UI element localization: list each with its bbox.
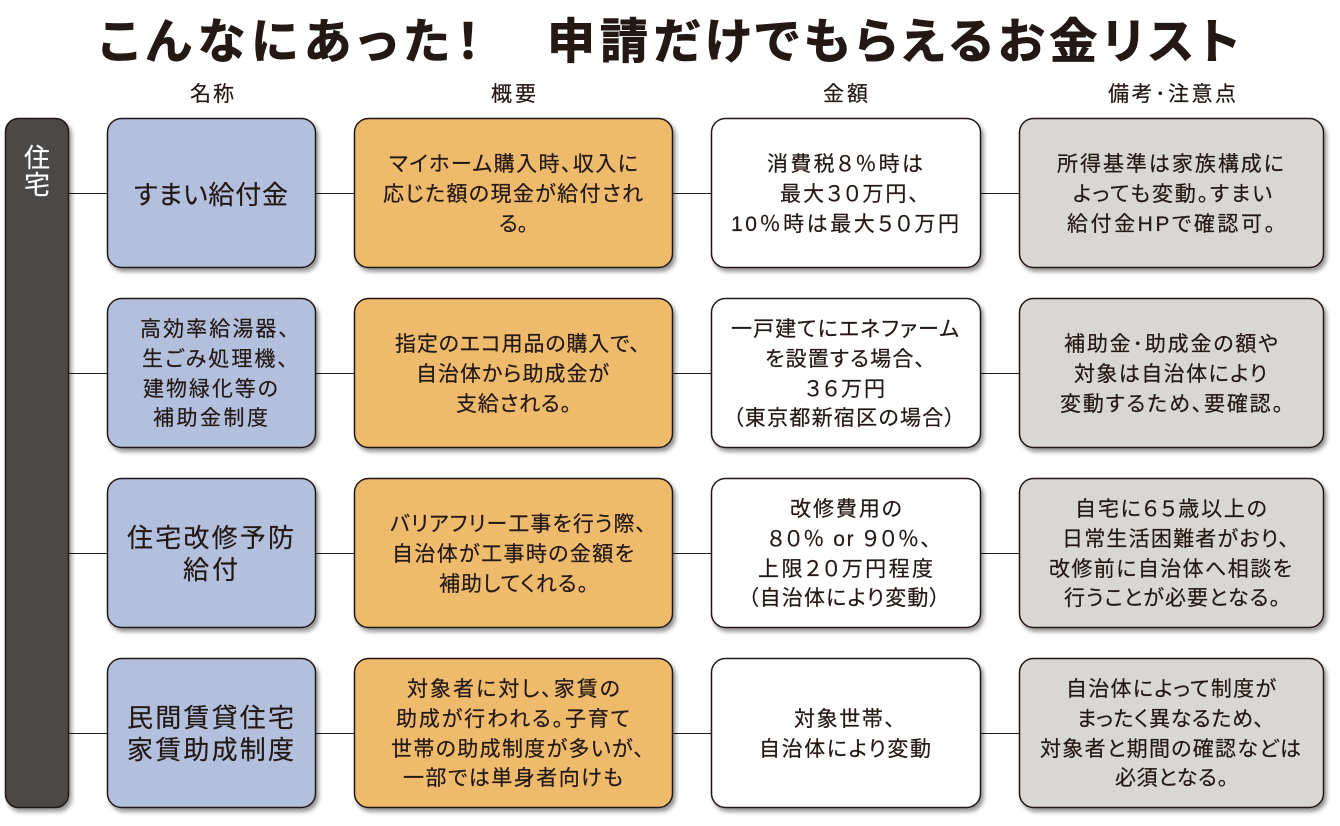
row 4 overview: 世帯の助成制度が多いが、 xyxy=(391,738,644,761)
row 1 overview: る。 xyxy=(499,213,528,236)
row 2 overview: 自治体から助成金が xyxy=(416,363,609,386)
row 2 notes: 変動するため、要確認。 xyxy=(1060,393,1283,416)
row 2 amount: を設置する場合、 xyxy=(765,348,925,371)
row 4 overview: 助成が行われる。子育て xyxy=(396,708,630,731)
category bar: housing: 宅 xyxy=(24,170,50,200)
column heading: overview: 概要 xyxy=(491,83,536,106)
row 4 overview xyxy=(354,658,672,808)
row 1 notes: よっても変動。すまい xyxy=(1073,183,1272,206)
row 3 overview: 補助してくれる。 xyxy=(439,573,588,596)
row 2 notes: 対象は自治体により xyxy=(1074,363,1267,386)
row 3 amount: （自治体により変動） xyxy=(748,587,940,610)
row 4 name xyxy=(108,658,316,808)
row 4 amount xyxy=(712,658,980,808)
row 4 notes: 対象者と期間の確認などは xyxy=(1040,738,1301,761)
row 1 amount xyxy=(712,118,980,268)
row 1 notes xyxy=(1020,118,1324,268)
row 3 amount: ８０％ or ９０％、 xyxy=(768,528,931,551)
row 2 overview: 指定のエコ用品の購入で、 xyxy=(395,333,640,356)
row 2 amount xyxy=(712,298,980,448)
row 1 overview xyxy=(354,118,672,268)
row 2 notes: 補助金･助成金の額や xyxy=(1064,333,1278,356)
row 4 amount: 自治体により変動 xyxy=(759,738,931,761)
row 3 amount: 改修費用の xyxy=(790,498,902,521)
row 1 notes: 給付金HPで確認可。 xyxy=(1067,213,1275,236)
row 1 overview: マイホーム購入時、収入に xyxy=(389,153,638,176)
row 3 notes: 自宅に６５歳以上の xyxy=(1075,498,1267,521)
row 1 amount: 最大３０万円、 xyxy=(780,183,919,206)
category bar: housing xyxy=(6,118,68,808)
row 2 amount: （東京都新宿区の場合） xyxy=(733,407,955,430)
row 3 amount: 上限２０万円程度 xyxy=(758,558,933,581)
row 2 amount: 一戸建てにエネファーム xyxy=(731,318,959,341)
row 2 overview: 支給される。 xyxy=(456,393,571,416)
row 3 overview: 自治体が工事時の金額を xyxy=(392,543,634,566)
row 1 name xyxy=(108,118,316,268)
row 2 name: 補助金制度 xyxy=(153,407,268,430)
column heading: amount: 金額 xyxy=(823,83,868,106)
row 2 name: 高効率給湯器、 xyxy=(140,318,289,341)
row 1 name: すまい給付金 xyxy=(134,180,288,210)
row 3 name: 住宅改修予防 xyxy=(127,523,294,553)
row 2 name: 生ごみ処理機、 xyxy=(142,348,288,371)
column heading: name: 名称 xyxy=(190,83,234,106)
row 3 notes: 日常生活困難者がおり、 xyxy=(1062,528,1289,551)
row 2 amount: ３６万円 xyxy=(805,378,885,401)
title: 申請だけでもらえるお金リスト xyxy=(547,16,1239,69)
column heading: notes: 備考･注意点 xyxy=(1108,83,1236,106)
row 2 overview xyxy=(354,298,672,448)
row 4 name: 家賃助成制度 xyxy=(127,735,294,765)
row 3 notes: 改修前に自治体へ相談を xyxy=(1049,558,1292,581)
row 1 amount: 10％時は最大５０万円 xyxy=(731,213,959,236)
row 3 overview xyxy=(354,478,672,628)
row 3 notes xyxy=(1020,478,1324,628)
row 4 overview: 一部では単身者向けも xyxy=(403,767,623,790)
title: こんなにあった！ xyxy=(99,16,480,69)
row 2 notes xyxy=(1020,298,1324,448)
row 4 name: 民間賃貸住宅 xyxy=(127,703,294,733)
row 3 amount xyxy=(712,478,980,628)
row 3 notes: 行うことが必要となる。 xyxy=(1064,587,1280,610)
row 3 overview: バリアフリー工事を行う際、 xyxy=(390,513,646,536)
title xyxy=(99,16,1239,69)
row 4 overview: 対象者に対し、家賃の xyxy=(407,678,620,701)
row 2 name xyxy=(108,298,316,448)
row 2 name: 建物緑化等の xyxy=(143,378,278,401)
row 4 notes: 必須となる。 xyxy=(1115,767,1228,790)
category bar: housing: 住 xyxy=(24,143,50,173)
row 4 notes: まったく異なるため、 xyxy=(1077,708,1264,731)
row 4 notes xyxy=(1020,658,1324,808)
row 1 amount: 消費税８％時は xyxy=(767,153,923,176)
row 1 notes: 所得基準は家族構成に xyxy=(1057,153,1284,176)
row 1 overview: 応じた額の現金が給付され xyxy=(383,183,643,206)
row 3 name xyxy=(108,478,316,628)
row 3 name: 給付 xyxy=(183,555,238,585)
row 4 notes: 自治体によって制度が xyxy=(1066,678,1276,701)
row 4 amount: 対象世帯、 xyxy=(794,708,895,731)
